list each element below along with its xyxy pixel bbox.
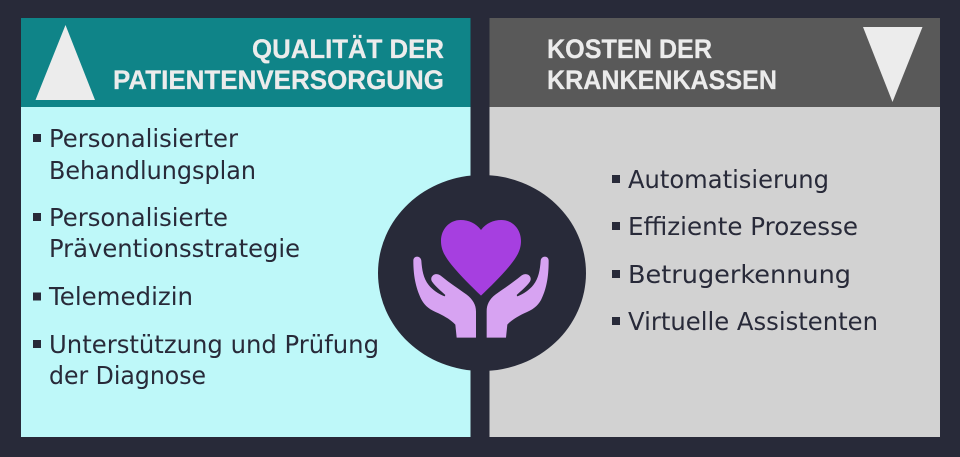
heading: Kosten der Krankenkassen: KOSTEN DER xyxy=(547,34,712,64)
heading: Kosten der Krankenkassen xyxy=(547,34,777,95)
icon: hands and heart xyxy=(413,220,549,338)
list: patient care items: Personalisierter xyxy=(49,124,239,153)
list: cost items: Effiziente Prozesse xyxy=(628,212,858,241)
center emblem: heart in hands xyxy=(378,175,586,371)
list: patient care items: Telemedizin xyxy=(48,282,193,311)
heading: Qualität der Patientenversorgung: QUALITÄT DER xyxy=(252,34,444,64)
panel: Kosten der Krankenkassen xyxy=(490,18,940,437)
list: patient care items: der Diagnose xyxy=(49,361,206,390)
list: patient care items: Unterstützung und Prüfung xyxy=(49,330,379,359)
header band: right xyxy=(490,18,940,107)
panel body: left xyxy=(21,107,470,437)
panel: Qualität der Patientenversorgung xyxy=(21,18,470,437)
heading: Kosten der Krankenkassen: KRANKENKASSEN xyxy=(547,65,777,95)
header band: left xyxy=(21,18,470,107)
icon: up triangle xyxy=(36,25,95,100)
icon: left hand xyxy=(413,257,476,338)
list: patient care items: Behandlungsplan xyxy=(49,156,256,185)
icon: heart xyxy=(441,220,521,296)
icon: down triangle xyxy=(863,27,922,102)
heading: Qualität der Patientenversorgung xyxy=(113,34,444,95)
list: cost items: Virtuelle Assistenten xyxy=(628,307,878,336)
list: patient care items: Präventionsstrategie xyxy=(49,234,300,263)
emblem background circle xyxy=(378,175,586,371)
list: patient care items: Personalisierte xyxy=(49,203,228,232)
list: patient care items xyxy=(33,124,379,390)
list: cost items: Betrugerkennung xyxy=(628,260,851,289)
heading: Qualität der Patientenversorgung: PATIENTENVERSORGUNG xyxy=(113,65,444,95)
icon: right hand xyxy=(487,257,549,338)
list: cost items xyxy=(612,165,878,336)
panel body: right xyxy=(490,107,940,437)
list: cost items: Automatisierung xyxy=(628,165,829,194)
